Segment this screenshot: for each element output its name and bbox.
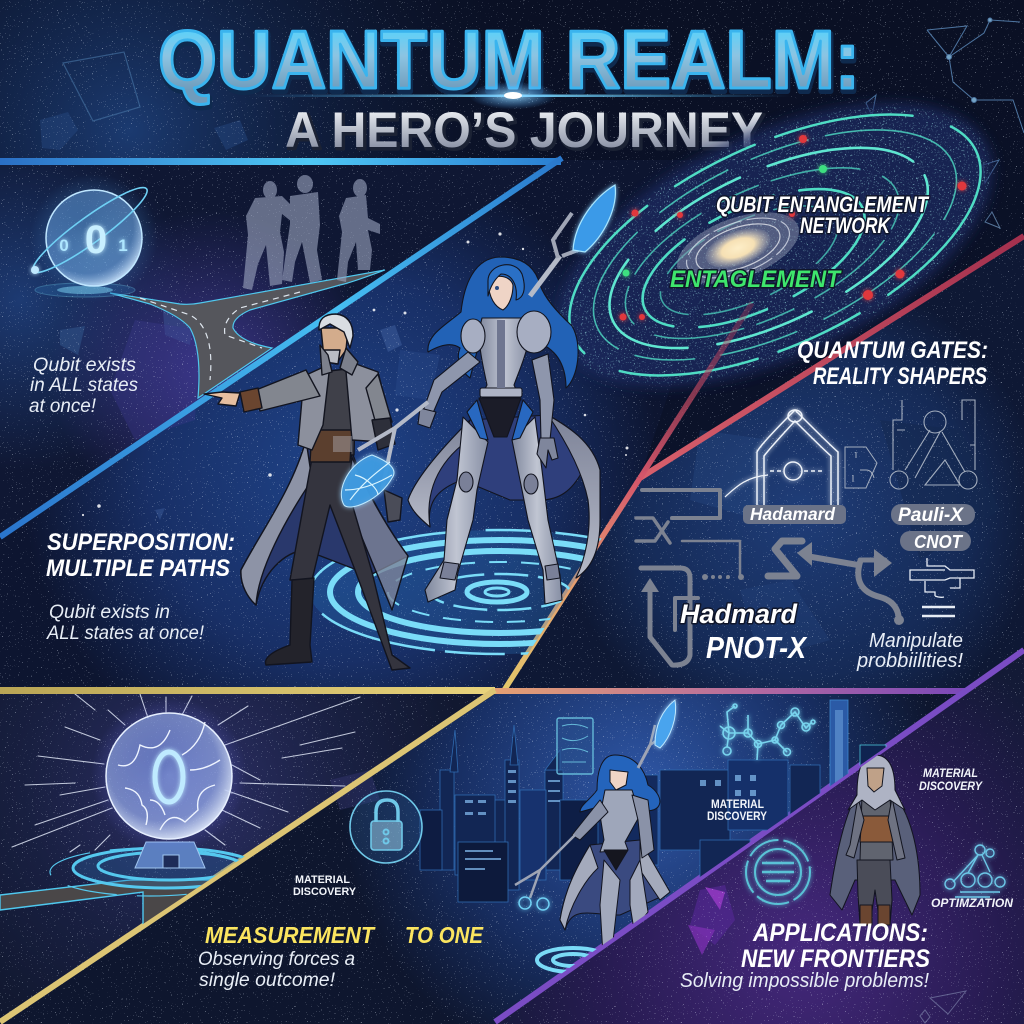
city heroine hair xyxy=(580,755,660,812)
heading: applications: APPLICATIONS: xyxy=(752,919,928,947)
text: measurement body: Observing forces a xyxy=(198,949,355,970)
label: material discovery, lock xyxy=(293,874,357,898)
label pill: Hadamard: Hadamard xyxy=(750,504,835,524)
mentor torso xyxy=(298,360,390,462)
elder face xyxy=(867,768,884,792)
qubit digits: 1 xyxy=(118,236,128,255)
city heroine hips xyxy=(604,850,628,870)
city heroine cape edges xyxy=(560,840,670,930)
platform rings xyxy=(50,848,257,896)
galaxy core xyxy=(668,198,808,298)
text: superposition caption: at once! xyxy=(29,396,97,417)
panel: quantum gates xyxy=(636,400,977,665)
text: measurement body xyxy=(198,949,355,991)
heroine knee plates xyxy=(440,472,560,580)
label: material discovery, lock: DISCOVERY xyxy=(293,886,357,898)
city windows xyxy=(465,710,843,870)
label: material discovery, right: DISCOVERY xyxy=(919,779,983,793)
heroine legs xyxy=(425,417,562,604)
elder hair xyxy=(848,755,905,810)
mentor's energy staff xyxy=(341,402,428,507)
heroine xyxy=(408,257,600,604)
measured zero xyxy=(155,752,183,802)
title line 1: QUANTUM REALM: xyxy=(159,16,861,109)
icon: hologram dial xyxy=(746,840,810,904)
title xyxy=(158,13,861,160)
entanglement nodes xyxy=(620,135,966,320)
label: material discovery, city: MATERIAL xyxy=(711,799,764,811)
holographic platform xyxy=(313,528,602,656)
text: superposition body: ALL states at once! xyxy=(46,623,205,644)
subtitle: A HERO’S JOURNEY xyxy=(285,102,763,158)
text: measurement body: single outcome! xyxy=(199,970,336,991)
label: Hadmard PNOT-X xyxy=(680,599,808,665)
elder torso xyxy=(860,795,893,860)
heading: superposition xyxy=(46,529,235,582)
label: material discovery, city: DISCOVERY xyxy=(707,811,767,823)
heading: measurement xyxy=(205,922,484,948)
heading: qubit entanglement network: NETWORK xyxy=(800,213,892,238)
ghost 1 xyxy=(243,181,290,290)
panel: measurement xyxy=(0,694,360,925)
city platform xyxy=(537,948,609,972)
icon: lock hologram xyxy=(350,791,422,863)
mentor gauntlet arm xyxy=(366,374,402,522)
heroine in the city xyxy=(560,755,670,955)
ghost hero silhouettes xyxy=(243,175,380,290)
heroine cape xyxy=(408,415,600,578)
title line 1: QUANTUM REALM: xyxy=(158,13,860,106)
heroine shoulder armor xyxy=(461,311,551,353)
heroine arms xyxy=(422,352,554,440)
collapsing sphere xyxy=(96,702,242,844)
label: material discovery, right xyxy=(919,766,983,793)
mentor hero xyxy=(204,314,410,670)
text: gates caption xyxy=(856,630,963,672)
elder cape xyxy=(830,790,920,915)
city heroine legs xyxy=(600,860,648,955)
heroine torso armor xyxy=(467,318,533,440)
icon: molecule xyxy=(720,704,815,760)
heading: measurement: TO ONE xyxy=(405,922,484,948)
gate: block symbol xyxy=(845,447,877,488)
qubit sphere xyxy=(28,180,152,298)
text: superposition body: Qubit exists in xyxy=(49,602,170,623)
ghost 3 xyxy=(337,179,380,282)
text: gates caption: Manipulate xyxy=(869,630,963,652)
title flare divider xyxy=(250,82,790,110)
galaxy: qubit entanglement network xyxy=(515,44,1024,446)
subtitle: A HERO’S JOURNEY xyxy=(287,104,765,160)
heading: qubit entanglement network: QUBIT ENTANGLEMENT xyxy=(716,192,929,217)
label: material discovery, lock: MATERIAL xyxy=(295,874,350,886)
text: superposition caption: in ALL states xyxy=(30,375,138,396)
label: Hadmard PNOT-X: Hadmard xyxy=(680,599,798,629)
heading: superposition: MULTIPLE PATHS xyxy=(46,555,230,582)
gate: arrowheads and dots xyxy=(641,542,904,625)
elder legs and boots xyxy=(857,860,892,925)
heading: quantum gates: QUANTUM GATES: xyxy=(797,337,988,364)
road fork xyxy=(110,270,385,398)
mentor head xyxy=(319,314,358,375)
city skyline xyxy=(350,700,886,972)
label pill: CNOT: CNOT xyxy=(914,531,964,552)
rays xyxy=(12,694,360,852)
elder arms xyxy=(846,798,905,860)
text: superposition caption: Qubit exists xyxy=(33,355,137,376)
gate: CNOT white circuit xyxy=(910,558,974,616)
text: superposition caption xyxy=(29,355,138,417)
label pill: Pauli-X: Pauli-X xyxy=(898,505,964,526)
heroine head xyxy=(488,265,524,310)
elder mentor xyxy=(830,755,920,925)
label: entanglement: ENTAGLEMENT xyxy=(670,266,842,293)
mentor pointing arm xyxy=(204,370,320,412)
heading: qubit entanglement network xyxy=(716,192,929,238)
heroine staff hand and gauntlet xyxy=(418,408,558,468)
heroine hair back xyxy=(428,257,578,388)
pedestal xyxy=(135,842,205,868)
gate: Pauli-X line art xyxy=(890,400,977,489)
decorative triangle xyxy=(920,991,966,1023)
elder belt xyxy=(860,816,894,842)
decorative square outline, top left xyxy=(63,52,140,121)
city heroine cape xyxy=(560,840,665,930)
text: gates caption: probbiilities! xyxy=(856,650,963,672)
label: material discovery, city xyxy=(707,799,767,823)
heading: measurement: MEASUREMENT xyxy=(205,922,376,948)
panel: applications xyxy=(746,755,1005,1023)
mentor legs and boots xyxy=(266,458,410,670)
heading: superposition: SUPERPOSITION: xyxy=(47,529,235,556)
gate: circuit paths xyxy=(636,490,899,665)
qubit digits xyxy=(57,222,129,256)
road xyxy=(0,880,230,925)
text: applications body: Solving impossible problems! xyxy=(680,970,929,992)
heading: applications xyxy=(741,919,930,973)
heading: quantum gates xyxy=(797,337,988,390)
heading: applications: NEW FRONTIERS xyxy=(741,945,930,973)
label: optimization: OPTIMZATION xyxy=(931,898,1014,910)
label: Hadmard PNOT-X: PNOT-X xyxy=(706,630,808,665)
city heroine's staff xyxy=(515,700,676,910)
city heroine face xyxy=(610,770,628,790)
city heroine arms xyxy=(572,795,654,858)
qubit digits: 0 xyxy=(85,218,107,262)
gate: Hadamard arch xyxy=(725,410,838,505)
icon: data card xyxy=(557,718,593,774)
text: superposition body xyxy=(46,602,205,644)
city heroine torso xyxy=(600,790,640,852)
panel: superposition multiple paths xyxy=(26,174,385,398)
mentor coat tails xyxy=(241,440,408,610)
icon: optimization graph xyxy=(945,845,1005,897)
decorative constellation, top right xyxy=(866,18,1024,228)
heroine's crystal spear xyxy=(530,185,615,296)
ghost 2 xyxy=(282,175,322,283)
skyline buildings xyxy=(420,700,886,902)
qubit digits: 0 xyxy=(59,236,69,255)
label: material discovery, right: MATERIAL xyxy=(923,766,978,780)
